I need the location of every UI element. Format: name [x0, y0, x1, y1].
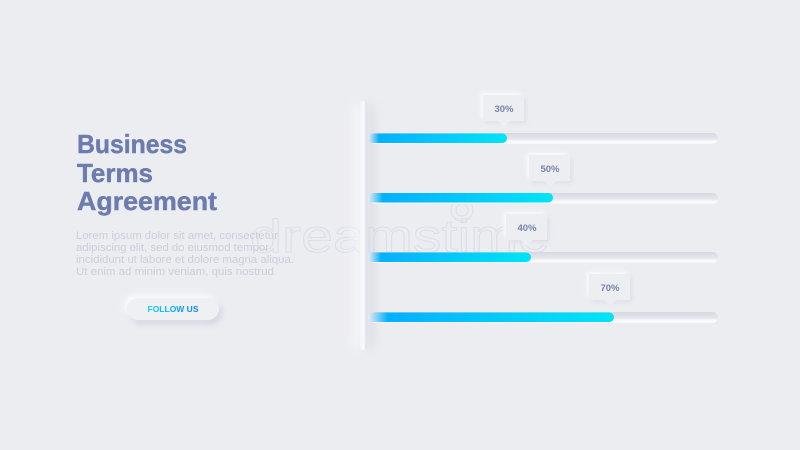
bar 4: 70% [368, 312, 718, 323]
tooltip: 70%: 70% [600, 283, 620, 294]
body text: adipiscing elit, sed do eiusmod tempor [76, 242, 269, 254]
bar 2: 50% [368, 193, 718, 204]
bar chart [368, 133, 718, 323]
tooltip: 70% [587, 272, 632, 306]
body text: incididunt ut labore et dolore magna aliqua. [76, 254, 294, 266]
tooltip: 50% [527, 153, 572, 187]
watermark: dreamstime [250, 210, 550, 262]
button: follow us [124, 295, 222, 324]
tooltip: 40% [504, 212, 549, 246]
tooltip: 30% [481, 93, 526, 127]
bar 1: 30% [368, 133, 718, 144]
bar 3: 40% [368, 252, 718, 263]
button: follow us: FOLLOW US [148, 304, 199, 314]
axis [354, 101, 373, 350]
body text: Lorem ipsum dolor sit amet, consectetur [76, 230, 278, 242]
title: Agreement [77, 186, 217, 216]
title: Business [77, 129, 187, 159]
body text: Ut enim ad minim veniam, quis nostrud [76, 266, 274, 278]
tooltip: 50%: 50% [540, 164, 560, 175]
title: Terms [77, 158, 153, 188]
tooltip: 40%: 40% [517, 223, 537, 234]
watermark [250, 199, 550, 262]
tooltip: 30%: 30% [494, 104, 514, 115]
